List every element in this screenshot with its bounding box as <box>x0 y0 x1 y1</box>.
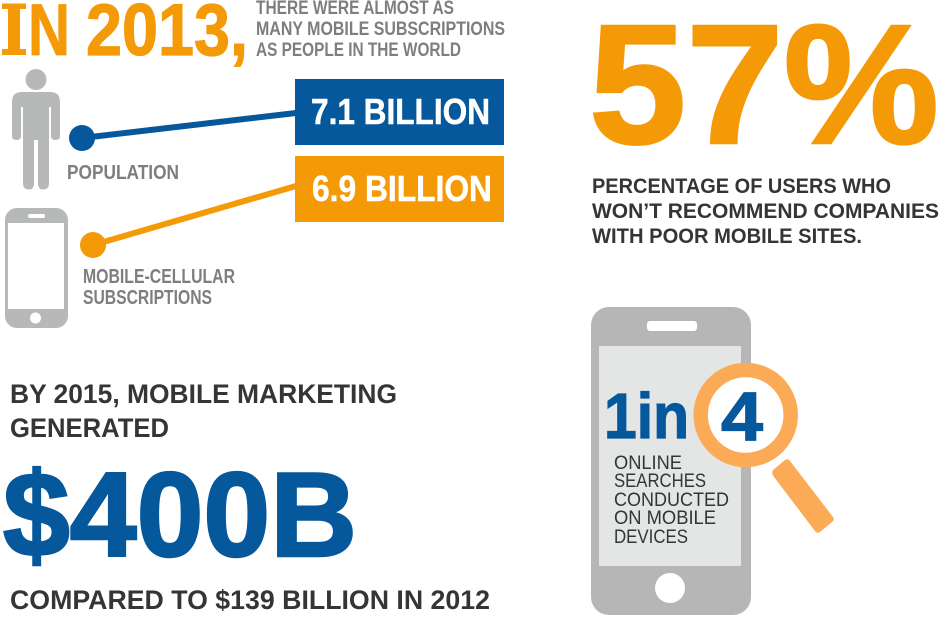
icon: person <box>12 69 60 190</box>
text: online searches: DEVICES <box>614 527 688 548</box>
intro text: MANY MOBILE SUBSCRIPTIONS <box>256 18 505 40</box>
intro text <box>256 0 505 61</box>
label: mobile-cellular subscriptions: MOBILE-CELLULAR <box>83 266 235 288</box>
callout: 7.1 billion <box>295 79 504 145</box>
icon: large phone <box>591 307 751 615</box>
text: 57% description: PERCENTAGE OF USERS WHO <box>592 174 891 198</box>
label: mobile-cellular subscriptions <box>83 266 235 309</box>
connector: subscriptions <box>80 186 296 258</box>
icon: small phone <box>5 208 68 328</box>
label: population: POPULATION <box>67 162 179 184</box>
text: 57% description: WITH POOR MOBILE SITES. <box>592 224 862 248</box>
title: In 2013 <box>2 0 248 71</box>
callout: 7.1 billion: 7.1 BILLION <box>311 91 490 132</box>
stat: 4: 4 <box>721 378 763 455</box>
text: 57% description: WON’T RECOMMEND COMPANIES <box>592 199 939 223</box>
text: comparison: COMPARED TO $139 BILLION IN 2012 <box>10 585 490 615</box>
label: mobile-cellular subscriptions: SUBSCRIPTIONS <box>83 287 212 309</box>
text: online searches <box>614 453 729 548</box>
text: by 2015 heading <box>10 379 397 443</box>
big stat: $400B: $400B <box>3 448 357 582</box>
callout: 6.9 billion <box>295 156 504 222</box>
text: 57% description <box>592 174 939 248</box>
text: online searches: ONLINE <box>614 453 682 474</box>
text: online searches: CONDUCTED <box>614 490 729 511</box>
intro text: AS PEOPLE IN THE WORLD <box>256 39 461 61</box>
text: by 2015 heading: GENERATED <box>10 413 169 443</box>
text: by 2015 heading: BY 2015, MOBILE MARKETING <box>10 379 397 409</box>
text: online searches: ON MOBILE <box>614 508 716 529</box>
icon: magnifying glass <box>701 370 834 533</box>
text: online searches: SEARCHES <box>614 471 706 492</box>
callout: 6.9 billion: 6.9 BILLION <box>312 168 492 209</box>
stat: 1 in: 1in <box>604 380 689 452</box>
connector: population <box>69 113 296 151</box>
